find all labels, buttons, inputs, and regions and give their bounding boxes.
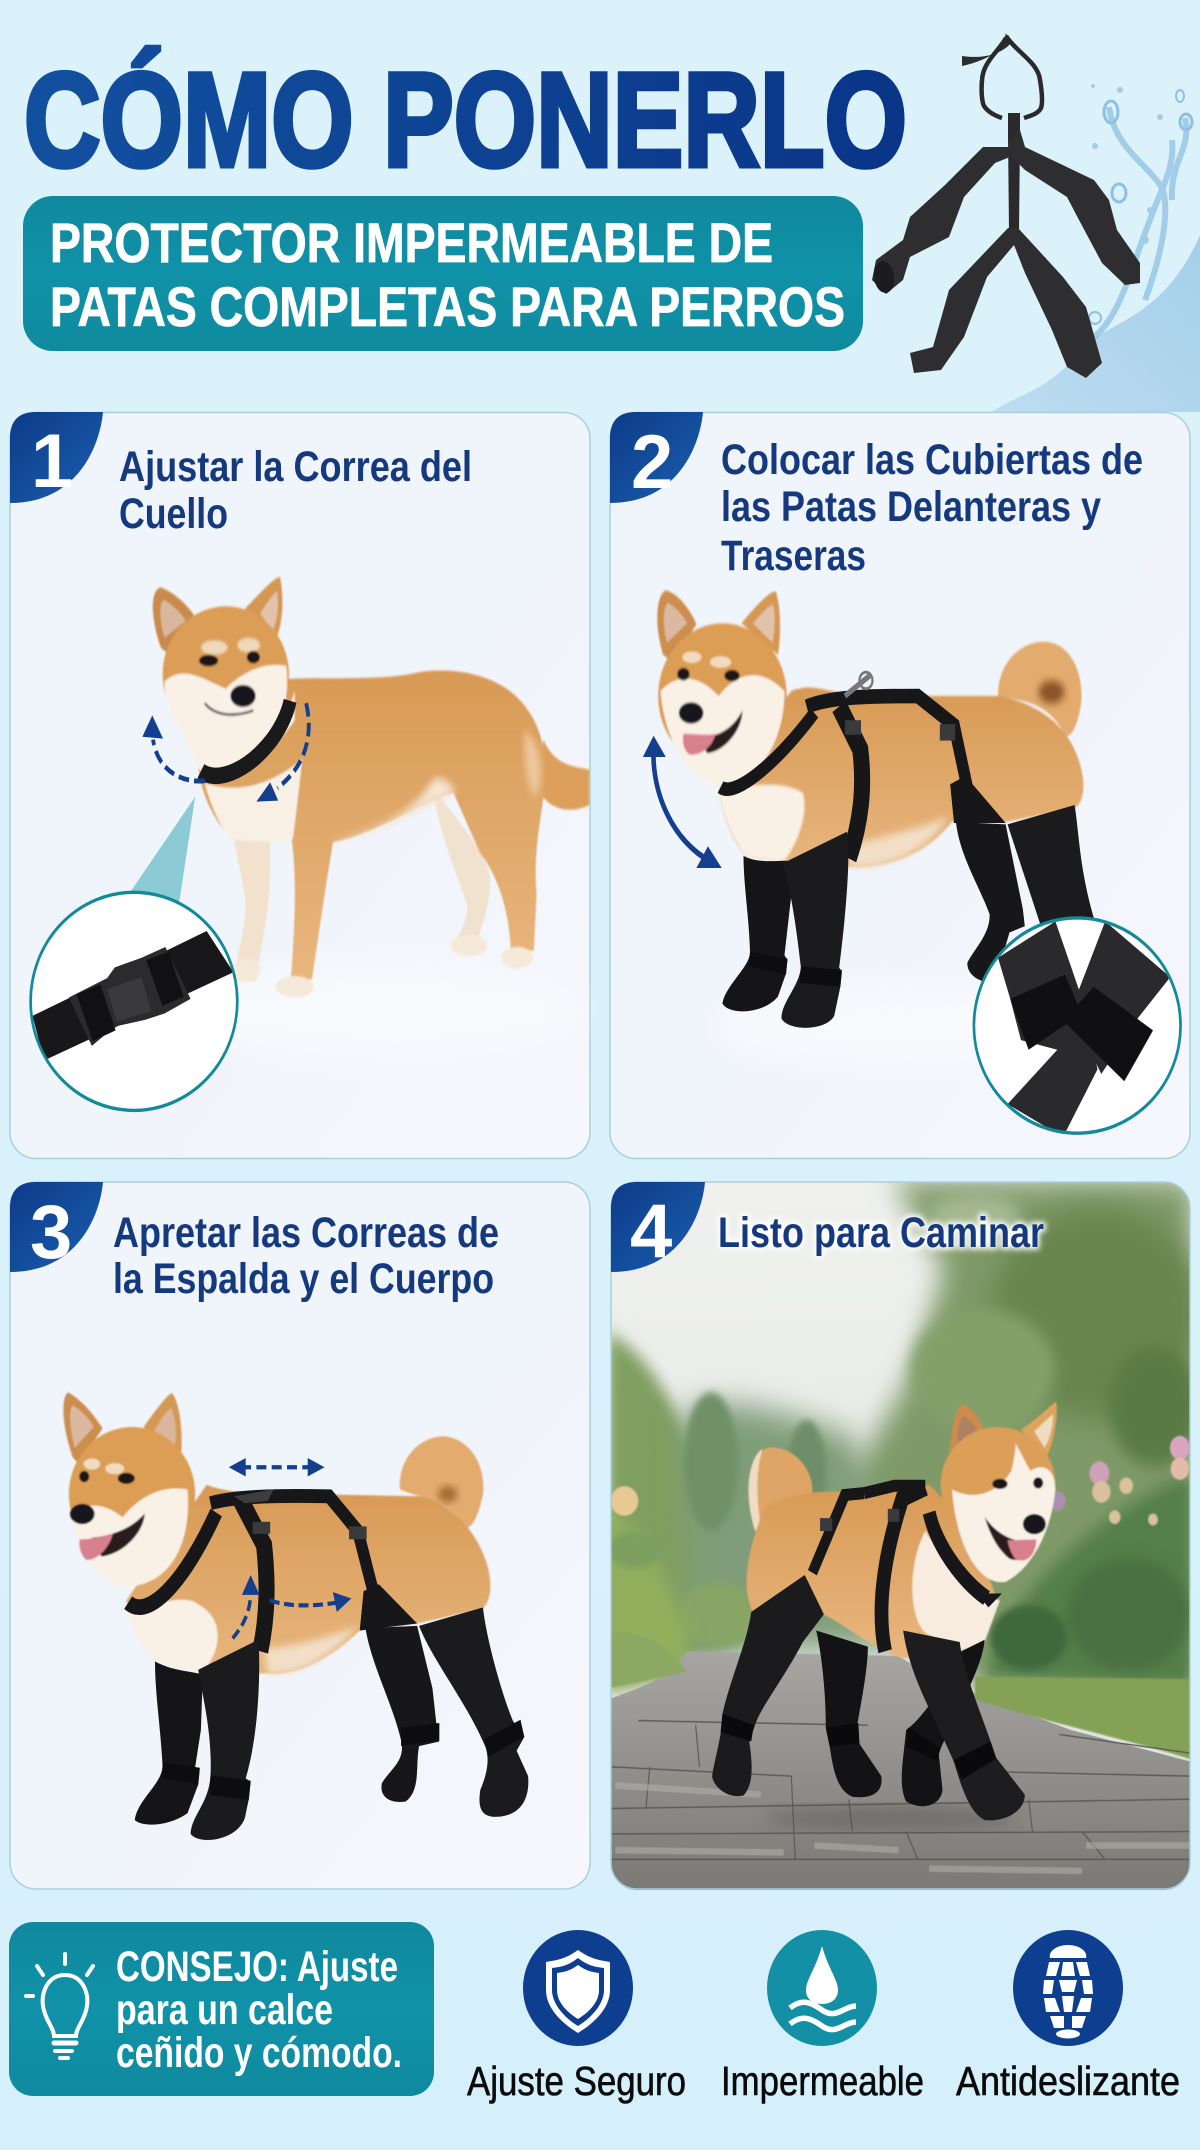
- subtitle banner: PROTECTOR IMPERMEABLE DE: [50, 211, 773, 274]
- panel 3 heading: Apretar las Correas de: [113, 1209, 499, 1257]
- panel 3 heading: [113, 1209, 499, 1303]
- icon: light bulb: [26, 1954, 93, 2058]
- callout: buckle detail: [31, 797, 237, 1110]
- feature: secure fit: [467, 1930, 686, 2104]
- panel 1 heading: Ajustar la Correa del: [119, 443, 472, 491]
- dog standing with collar: [153, 577, 589, 1055]
- panel 2 background: [610, 412, 1190, 1158]
- panel 4 badge: [611, 1182, 705, 1274]
- tip box: ceñido y cómodo.: [116, 2029, 402, 2077]
- callout: strap detail: [974, 918, 1181, 1137]
- feature: waterproof: [721, 1930, 924, 2104]
- feature: waterproof: Impermeable: [721, 2058, 924, 2104]
- panel 3 badge: [10, 1182, 103, 1275]
- strap tightening arrows: [229, 1458, 351, 1638]
- panel 2 badge: 2: [631, 420, 673, 505]
- panel 2 heading: las Patas Delanteras y: [721, 483, 1101, 531]
- neck strap arrows: [142, 703, 309, 802]
- outdoor photo scene: [608, 1180, 1200, 1892]
- product: harness with leg covers: [872, 33, 1140, 378]
- panel 3: tighten back and body straps: [10, 1182, 590, 1889]
- panel 1 badge: 1: [31, 419, 73, 504]
- panel 4 badge: 4: [630, 1189, 672, 1274]
- icon: water drop: [767, 1930, 877, 2046]
- subtitle banner: PATAS COMPLETAS PARA PERROS: [50, 275, 845, 338]
- title: CÓMO PONERLO: [24, 46, 907, 195]
- dog with leg covers: [657, 590, 1096, 1059]
- icon: shield: [523, 1930, 633, 2046]
- feature: secure fit: Ajuste Seguro: [467, 2058, 686, 2104]
- panel 1 heading: Cuello: [119, 490, 228, 538]
- panel 4: ready to walk: [608, 1180, 1200, 1892]
- water splash: [992, 84, 1200, 412]
- panel 4 border: [611, 1182, 1190, 1889]
- panel 1: adjust neck strap: [10, 412, 590, 1158]
- panel 2 badge: [610, 412, 703, 505]
- tip box: para un calce: [116, 1986, 333, 2034]
- subtitle banner: [23, 196, 863, 351]
- panel 2 heading: Traseras: [721, 532, 866, 580]
- adjust arrow: [643, 736, 722, 868]
- panel 4 heading: Listo para Caminar: [718, 1209, 1044, 1257]
- panel 1 heading: [119, 443, 472, 538]
- panel 1 background: [10, 412, 590, 1158]
- panel 3 heading: la Espalda y el Cuerpo: [113, 1255, 494, 1303]
- panel 2: place leg covers: [610, 412, 1190, 1158]
- panel 3 badge: 3: [30, 1190, 72, 1275]
- panel 2 heading: [721, 436, 1143, 580]
- icon: boot sole tread: [1013, 1930, 1123, 2046]
- panel 1 badge: [10, 412, 103, 504]
- walking dog: [712, 1402, 1057, 1829]
- tip box: [9, 1922, 434, 2096]
- tip box: CONSEJO: Ajuste: [116, 1943, 398, 1991]
- panel 4 heading: Listo para Caminar: [718, 1209, 1044, 1257]
- feature: non-slip: [956, 1930, 1180, 2104]
- dog with tightened straps: [63, 1392, 528, 1840]
- panel 3 background: [10, 1182, 590, 1889]
